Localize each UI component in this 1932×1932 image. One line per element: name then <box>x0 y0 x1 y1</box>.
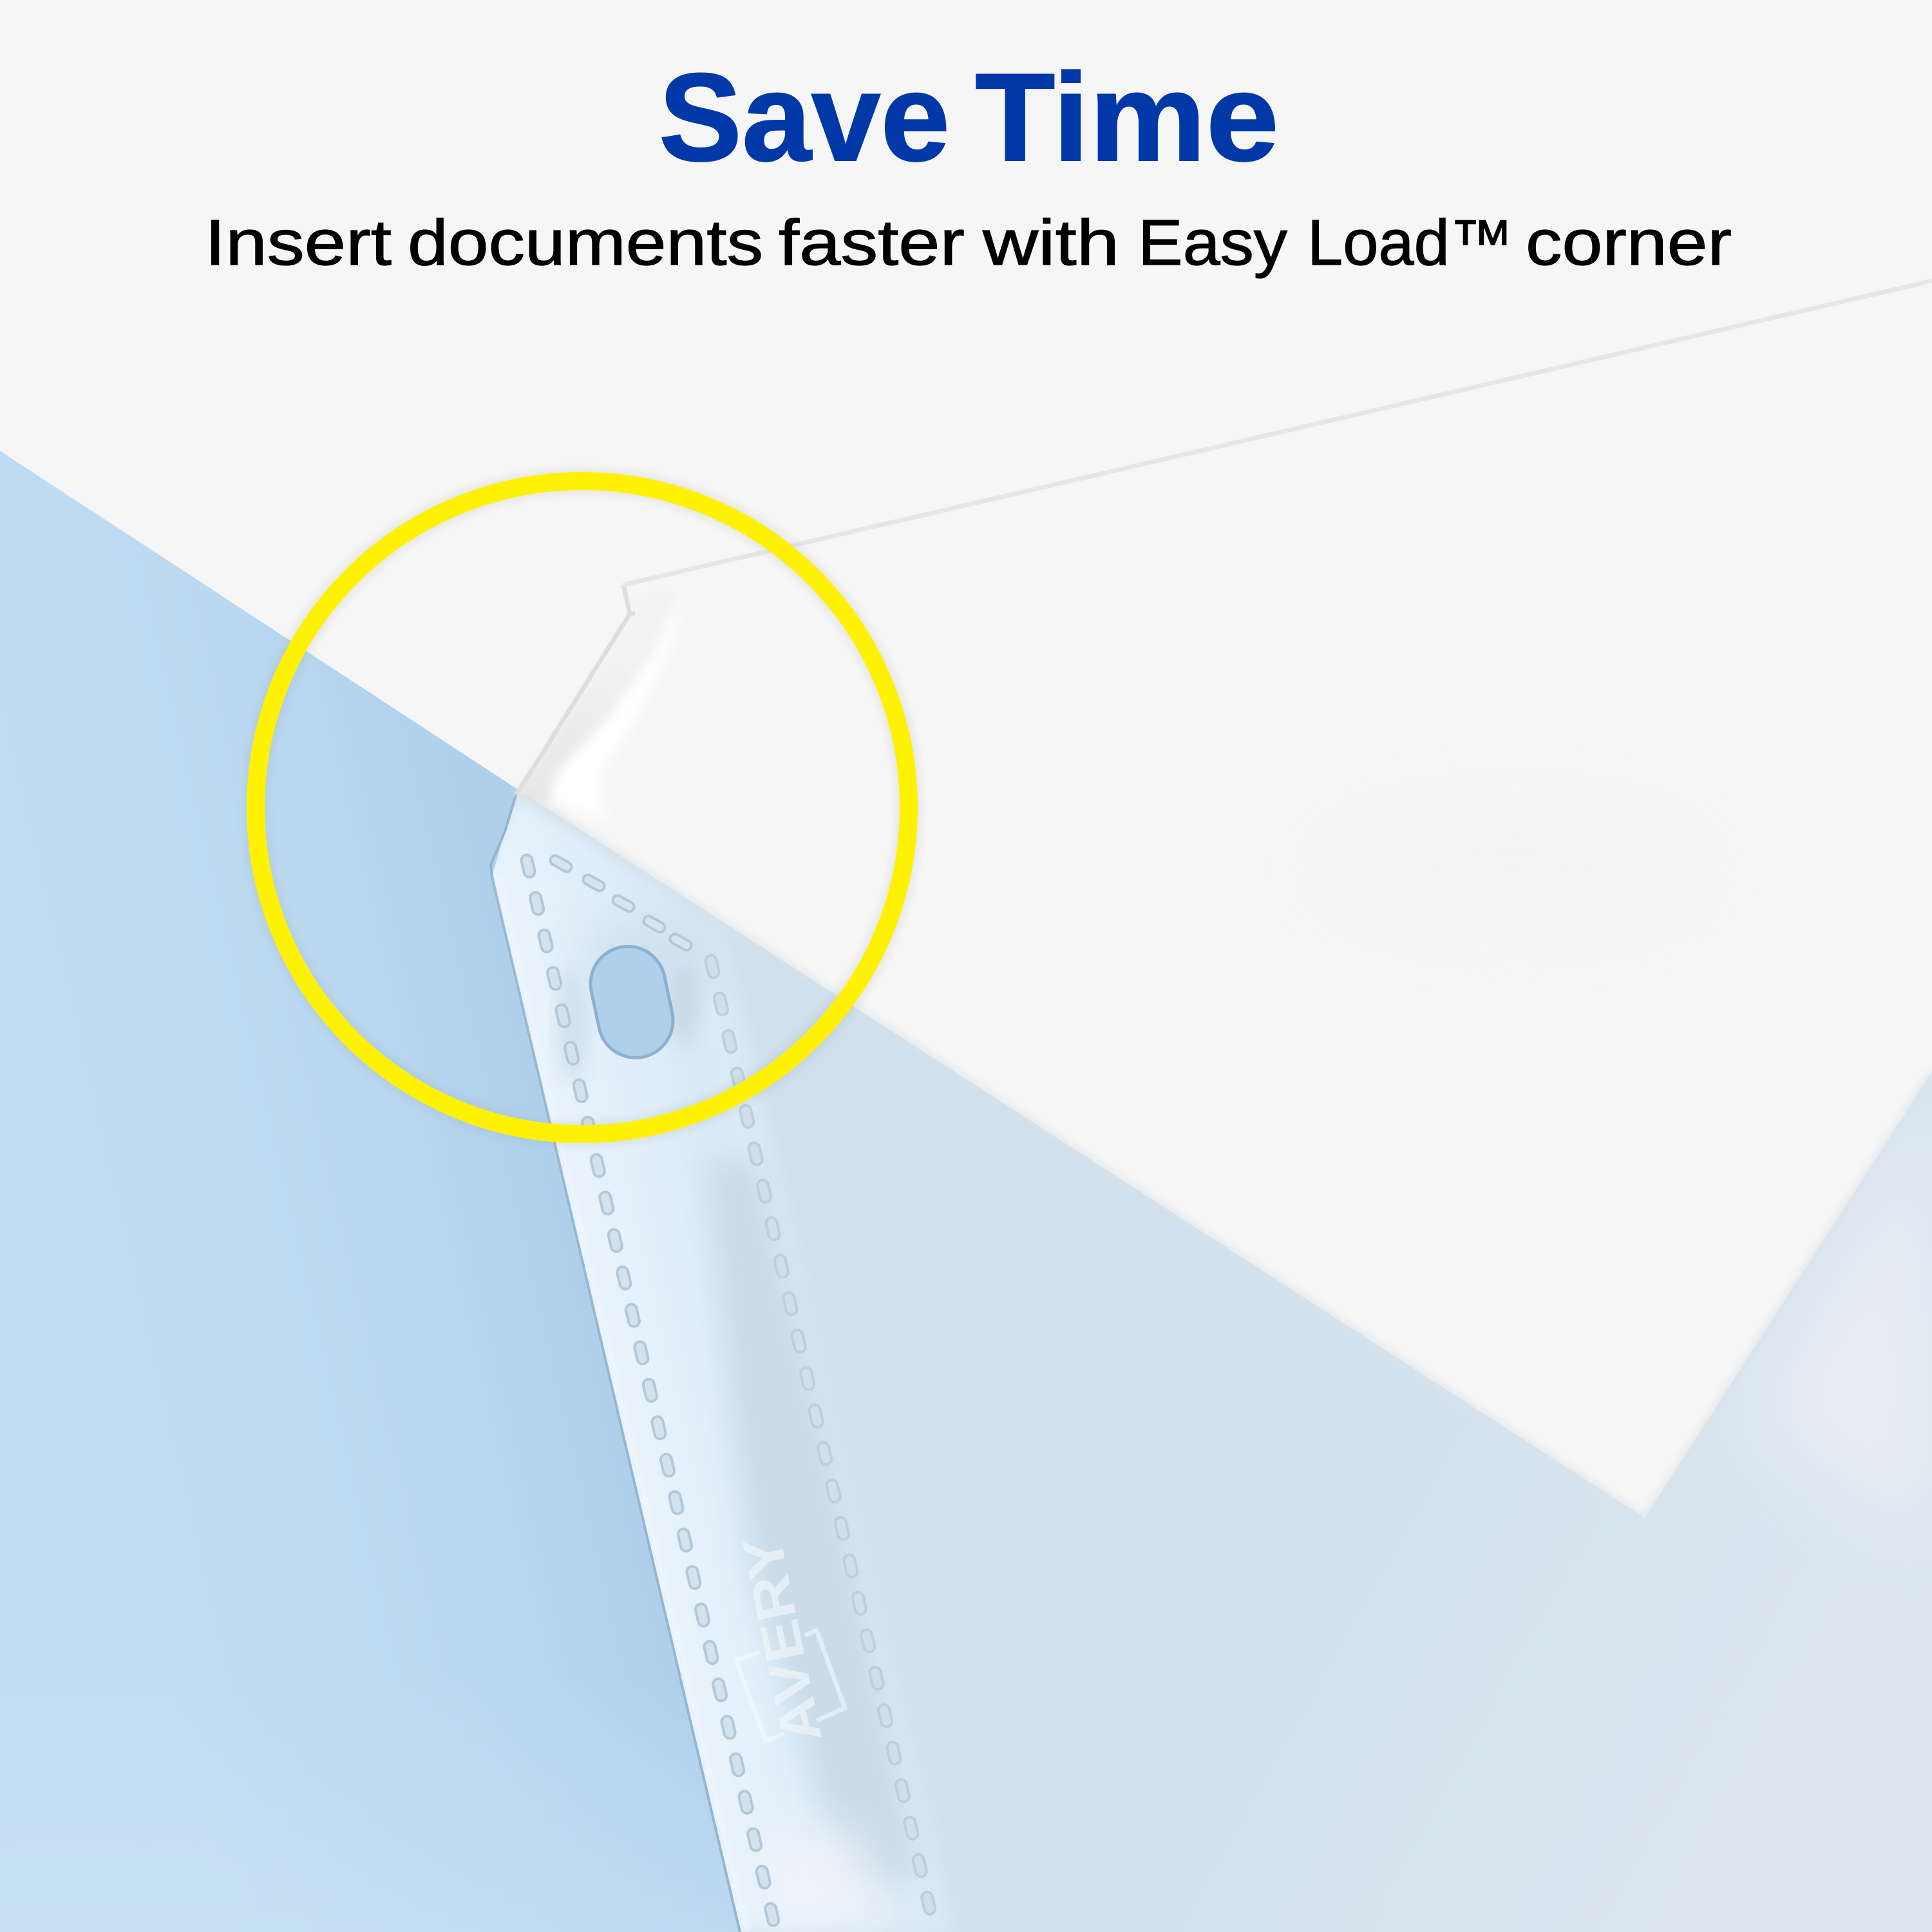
AVERY logo watermark <box>731 1531 845 1748</box>
grey frosted band in strip <box>705 1159 921 1880</box>
frosted patch left of hole <box>558 966 589 1082</box>
protector top corner over paper <box>516 281 1932 821</box>
title <box>659 48 1279 187</box>
subtitle <box>205 207 1732 279</box>
binding strip <box>493 799 819 1932</box>
fading lower edge of strip <box>787 1822 885 1932</box>
title: Time <box>975 48 1279 187</box>
sheet edge soft shadow <box>517 789 1932 1518</box>
edge highlight line <box>498 877 747 1932</box>
yellow callout ring <box>256 481 909 1134</box>
frosted patch right of hole <box>670 972 699 1043</box>
blue folder <box>0 451 837 1932</box>
translucent easy load flap band <box>516 589 679 804</box>
logo wordmark: AVERY <box>731 1531 834 1748</box>
subtitle: faster <box>779 207 965 279</box>
logo bracket right <box>805 1631 845 1721</box>
protector left edge <box>491 793 747 1932</box>
frosted patch around hole <box>587 925 676 969</box>
notch <box>623 585 630 614</box>
subtitle: corner <box>1526 207 1732 279</box>
logo bracket left <box>736 1652 784 1741</box>
right row of heat-seal perforations <box>711 961 935 1932</box>
subtitle: Load™ <box>1307 207 1513 279</box>
subtitle: Easy <box>1138 207 1287 279</box>
sheet soft shading <box>1307 799 1719 940</box>
top row of heat-seal perforations <box>555 860 687 945</box>
light halo along right perforations <box>711 1005 929 1932</box>
pale tint at lower right of protector <box>1774 1197 1932 1499</box>
edge shadow line <box>491 793 740 1932</box>
subtitle: with <box>982 207 1119 279</box>
white document sheet <box>0 0 1932 1518</box>
title: Save <box>659 48 950 187</box>
binder hole <box>583 940 680 1065</box>
left row of heat-seal perforations <box>527 860 776 1932</box>
corner fold highlight <box>551 583 685 821</box>
flap diagonal edge <box>516 614 635 795</box>
subtitle: Insert <box>205 207 392 279</box>
yellow callout ring shadow <box>256 481 909 1134</box>
subtitle: documents <box>408 207 763 279</box>
protector top edge <box>623 281 1932 585</box>
sheet protector body <box>451 793 1932 1932</box>
lighter blue at folder bottom <box>0 1674 837 1932</box>
